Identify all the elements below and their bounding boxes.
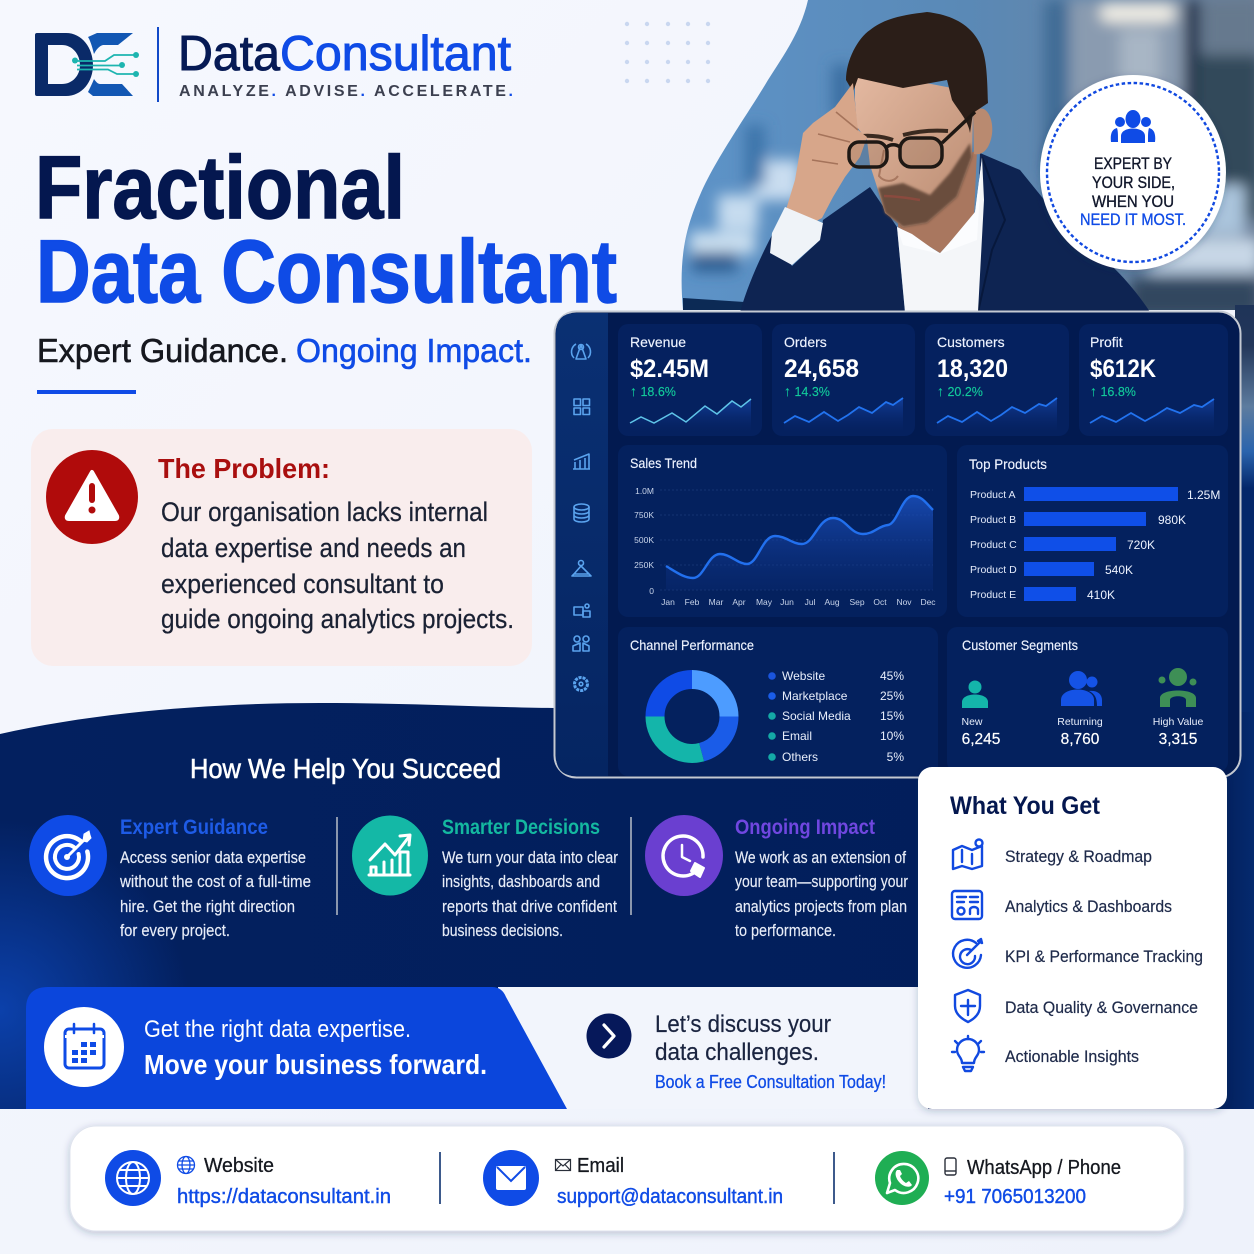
chart: sales trend: Jan: [661, 597, 675, 607]
monitor edge: [683, 298, 743, 310]
contact: email: Email: [577, 1155, 624, 1177]
face: [855, 78, 973, 227]
feature: ongoing impact: to performance.: [735, 922, 836, 940]
feature: smarter decisions: Smarter Decisions: [442, 816, 600, 839]
consultant figure: [740, 12, 1150, 312]
panel: what you get: Strategy & Roadmap: [1005, 847, 1152, 866]
donut legend: Email: [782, 729, 812, 743]
badge text: YOUR SIDE,: [1092, 174, 1175, 192]
icon: high value customer: [1158, 668, 1196, 707]
icon: dashboard: [952, 891, 982, 919]
icon: envelope: [496, 1166, 526, 1190]
icon: bars: [573, 454, 590, 469]
badge text: WHEN YOU: [1092, 193, 1174, 211]
kpi card: customers: ↑ 20.2%: [937, 383, 983, 399]
panel: the problem: [31, 429, 532, 666]
icon: calendar: [65, 1024, 104, 1068]
light call-to-action background: [498, 987, 928, 1109]
donut legend: Social Media: [782, 709, 851, 723]
call to action banner: Move your business forward.: [144, 1049, 487, 1080]
panel: what you get: [918, 767, 1227, 1109]
chart: top products: Product E: [970, 589, 1016, 601]
chart: top products: 410K: [1087, 588, 1115, 602]
chart: sales trend: Nov: [896, 597, 912, 607]
chart: top products: Top Products: [969, 456, 1047, 472]
panel: customer segments: 6,245: [962, 731, 1000, 748]
feature: smarter decisions: [352, 816, 618, 940]
eyebrows: [862, 131, 948, 140]
donut legend: Marketplace: [782, 689, 848, 703]
badge text: [1080, 155, 1186, 229]
icon: small envelope: [556, 1160, 570, 1170]
icon: shield: [955, 990, 980, 1022]
call to action banner: [26, 987, 567, 1109]
panel: customer segments: Returning: [1057, 716, 1103, 728]
kpi card: profit: Profit: [1090, 334, 1123, 350]
panel: what you get: KPI & Performance Tracking: [1005, 947, 1203, 966]
badge: expert by your side: [1040, 75, 1226, 270]
chart: top products: Product B: [970, 514, 1016, 526]
kpi card: orders: ↑ 14.3%: [784, 383, 830, 399]
logo wordmark: DataConsultant: [178, 27, 511, 81]
badge text: EXPERT BY: [1094, 155, 1172, 173]
dashboard panel: [554, 312, 1240, 778]
icon: DC logo mark: [35, 33, 139, 96]
feature: ongoing impact: your team—supporting your: [735, 873, 908, 891]
contact: email: [483, 1150, 783, 1208]
icon: new customer: [962, 680, 988, 708]
chart: top products: Product A: [970, 489, 1016, 501]
beard: [878, 143, 972, 227]
feature: smarter decisions: reports that drive confident: [442, 898, 617, 916]
contact: website: Website: [204, 1155, 274, 1177]
feature: expert guidance: [29, 815, 311, 940]
panel: what you get: Data Quality & Governance: [1005, 998, 1198, 1017]
glasses: [849, 112, 975, 167]
contact: email: support@dataconsultant.in: [557, 1186, 783, 1208]
problem text: experienced consultant to: [161, 569, 444, 599]
kpi card: revenue: $2.45M: [630, 355, 709, 383]
feature: ongoing impact: [645, 815, 908, 940]
ear: [973, 109, 992, 154]
consultation prompt: data challenges.: [655, 1039, 819, 1066]
icon: globe: [117, 1162, 149, 1194]
contact: whatsapp: WhatsApp / Phone: [967, 1157, 1121, 1179]
call to action banner: Get the right data expertise.: [144, 1016, 411, 1043]
hair: [846, 12, 988, 133]
kpi card: profit: [1079, 324, 1228, 436]
icon: target: [46, 831, 91, 878]
logo: [35, 27, 513, 102]
kpi card: revenue: ↑ 18.6%: [630, 383, 676, 399]
kpi card: orders: [772, 324, 915, 436]
consultation prompt: [655, 1011, 886, 1092]
logo tagline: ANALYZE. ADVISE. ACCELERATE.: [179, 83, 513, 100]
icon: people group: [1111, 110, 1155, 143]
panel: what you get: What You Get: [950, 792, 1101, 820]
chart: top products: 720K: [1127, 538, 1155, 552]
chart: sales trend: Dec: [920, 597, 936, 607]
icon: hierarchy: [572, 560, 591, 576]
feature: expert guidance: Expert Guidance: [120, 816, 268, 839]
kpi card: revenue: [618, 324, 762, 436]
icon: arrow button: [586, 1014, 632, 1058]
icon: returning customer: [1061, 671, 1102, 706]
chart: sales trend: Jul: [805, 597, 816, 607]
collar: [897, 158, 982, 254]
icon: people: [573, 636, 589, 651]
kpi card: customers: 18,320: [937, 355, 1008, 383]
chart: sales trend: [618, 445, 947, 617]
feature: ongoing impact: analytics projects from plan: [735, 898, 907, 916]
icon: kpi target: [953, 939, 982, 968]
feature: smarter decisions: insights, dashboards and: [442, 873, 600, 891]
chart: channel performance: Channel Performance: [630, 637, 754, 653]
title: Fractional: [35, 137, 405, 237]
chart: top products: [957, 445, 1228, 617]
photo: consultant in office: [680, 0, 1254, 318]
icon: small globe: [178, 1156, 194, 1174]
neck: [898, 150, 977, 253]
feature: ongoing impact: Ongoing Impact: [735, 816, 875, 839]
title: [35, 137, 617, 321]
panel: customer segments: 8,760: [1061, 731, 1100, 748]
icon: warning: [46, 450, 138, 544]
chart: top products: Product D: [970, 564, 1017, 576]
chart: sales trend: Apr: [732, 597, 746, 607]
icon: growth chart: [369, 835, 410, 875]
donut legend: 10%: [880, 729, 904, 743]
donut: [655, 680, 729, 753]
feature: smarter decisions: We turn your data into clear: [442, 849, 618, 867]
panel: customer segments: 3,315: [1159, 731, 1197, 748]
feature: expert guidance: Access senior data expertise: [120, 849, 306, 867]
chart: sales trend: Aug: [824, 597, 840, 607]
cuff: [770, 207, 823, 265]
contact bar: [70, 1126, 1184, 1231]
contact: website: https://dataconsultant.in: [177, 1186, 391, 1208]
donut legend: Others: [782, 750, 818, 764]
panel: what you get: Analytics & Dashboards: [1005, 897, 1172, 916]
icon: profile: [572, 344, 590, 359]
feature: smarter decisions: business decisions.: [442, 922, 563, 940]
chart: sales trend: Oct: [873, 597, 887, 607]
chart: sales trend: 750K: [634, 510, 654, 520]
icon: small phone: [945, 1158, 956, 1175]
suit: [740, 153, 1150, 312]
donut legend: 5%: [887, 750, 904, 764]
hand: [785, 83, 867, 228]
problem text: guide ongoing analytics projects.: [161, 604, 514, 634]
icon: map: [953, 840, 982, 869]
heading: how we help: How We Help You Succeed: [190, 753, 501, 784]
chart: top products: 1.25M: [1187, 488, 1220, 502]
decorative dot grid: [625, 22, 710, 83]
icon: whatsapp: [887, 1164, 918, 1193]
kpi card: profit: ↑ 16.8%: [1090, 383, 1136, 399]
panel: what you get: Actionable Insights: [1005, 1047, 1139, 1066]
panel: customer segments: [947, 627, 1228, 772]
mouth: [884, 196, 920, 200]
panel: customer segments: Customer Segments: [962, 637, 1078, 653]
icon: light bulb: [952, 1036, 984, 1071]
chart: top products: 980K: [1158, 513, 1186, 527]
icon: clock: [663, 836, 704, 877]
feature: ongoing impact: We work as an extension of: [735, 849, 906, 867]
chart: sales trend: Jun: [780, 597, 794, 607]
chart: top products: Product C: [970, 539, 1017, 551]
icon: grid: [574, 399, 590, 414]
problem text: Our organisation lacks internal: [161, 497, 488, 527]
chart: sales trend: 1.0M: [635, 486, 654, 496]
donut legend: 45%: [880, 669, 904, 683]
consultation prompt: Book a Free Consultation Today!: [655, 1072, 886, 1092]
chart: sales trend: 500K: [634, 535, 654, 545]
badge text: NEED IT MOST.: [1080, 211, 1186, 229]
shirt: [897, 157, 984, 312]
donut legend: Website: [782, 669, 825, 683]
chart: sales trend: Feb: [685, 597, 700, 607]
subtitle: Expert Guidance.: [37, 332, 288, 369]
dashboard sidebar: [556, 313, 608, 776]
contact: whatsapp: [875, 1151, 1121, 1208]
consultation prompt: Let’s discuss your: [655, 1011, 831, 1038]
chart: channel performance: [618, 627, 938, 776]
kpi card: orders: 24,658: [784, 355, 859, 383]
donut legend: 25%: [880, 689, 904, 703]
chart: top products: 540K: [1105, 563, 1133, 577]
donut legend: 15%: [880, 709, 904, 723]
title: Data Consultant: [36, 221, 617, 321]
icon: settings: [574, 678, 588, 690]
chart: sales trend: 250K: [634, 560, 654, 570]
chart: sales trend: 0: [649, 586, 654, 596]
kpi card: customers: Customers: [937, 334, 1005, 350]
contact: website: [105, 1150, 391, 1208]
feature: expert guidance: without the cost of a full-time: [119, 873, 311, 891]
problem text: [161, 497, 514, 634]
feature: expert guidance: hire. Get the right direction: [120, 898, 295, 916]
subtitle: Ongoing Impact.: [296, 332, 532, 369]
chart: sales trend: May: [756, 597, 773, 607]
kpi card: profit: $612K: [1090, 355, 1156, 383]
dark section background: [0, 703, 1254, 1109]
kpi card: revenue: Revenue: [630, 334, 686, 350]
icon: database: [574, 504, 589, 522]
chart: sales trend: Mar: [709, 597, 723, 607]
problem text: data expertise and needs an: [161, 533, 466, 563]
kpi card: customers: [925, 324, 1069, 436]
panel: customer segments: High Value: [1153, 716, 1203, 728]
icon: data store: [574, 604, 590, 617]
donut legend: [768, 669, 904, 764]
contact: whatsapp: +91 7065013200: [944, 1186, 1086, 1208]
panel: customer segments: New: [961, 716, 983, 728]
subtitle: [37, 332, 532, 394]
problem heading: The Problem:: [158, 453, 330, 484]
nose: [879, 150, 898, 181]
chart: sales trend: Sep: [849, 597, 865, 607]
feature: expert guidance: for every project.: [120, 922, 230, 940]
chart: sales trend: Sales Trend: [630, 455, 697, 471]
kpi card: orders: Orders: [784, 334, 827, 350]
